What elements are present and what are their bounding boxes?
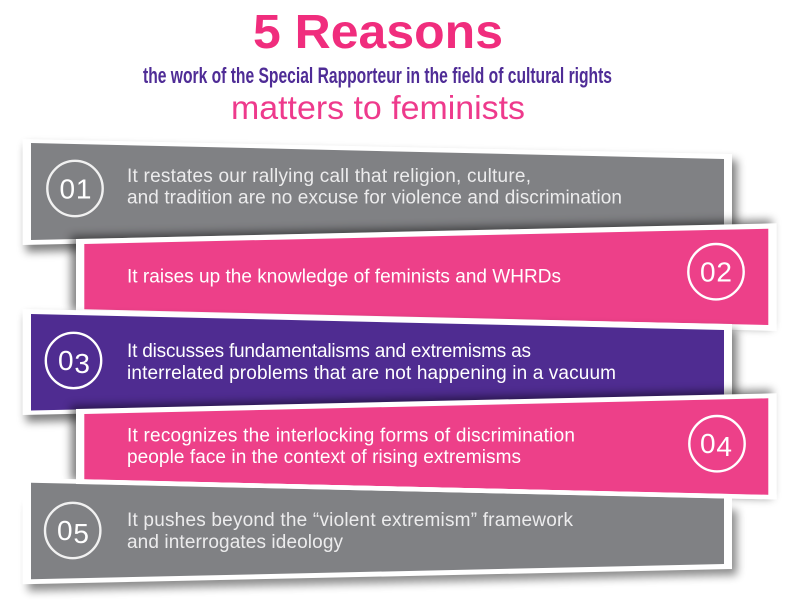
panel: reason 01 — [23, 139, 737, 252]
subheading: matters to feminists: matters to feminists — [231, 89, 525, 126]
text: reason 04 — [127, 426, 575, 468]
text: reason 05 — [127, 510, 574, 553]
subheading: special rapporteur: the work of the Special Rapporteur in the field of cultural rights — [143, 63, 612, 88]
text: reason 03: It discusses fundamentalisms and extremisms as — [127, 341, 531, 362]
icon: number 02: 02 — [700, 256, 733, 288]
icon: number 03 — [46, 333, 101, 388]
icon: number 03: 3 — [74, 348, 91, 379]
title — [143, 6, 612, 126]
text: reason 05: and interrogates ideology — [127, 532, 344, 553]
text: reason 01 — [127, 166, 622, 208]
icon: number 04 — [689, 416, 745, 471]
icon: number 05: 5 — [73, 518, 90, 549]
icon: number 05 — [45, 503, 100, 558]
text: reason 01: and tradition are no excuse for violence and discrimination — [127, 188, 622, 208]
icon: number 05: 0 — [57, 515, 73, 546]
text: reason 02: It raises up the knowledge of feminists and WHRDs — [127, 266, 561, 288]
text: reason 04: It recognizes the interlocking forms of discrimination — [127, 426, 575, 446]
icon: number 03: 0 — [58, 345, 74, 376]
panel: reason 04 — [71, 390, 777, 500]
panel: reason 05 — [23, 478, 777, 591]
panel: reason 02 — [71, 220, 777, 331]
icon: number 01: 01 — [60, 174, 92, 204]
text: reason 05: It pushes beyond the “violent extremism” framework — [127, 510, 574, 531]
icon: number 04: 0 — [700, 428, 716, 459]
heading: 5 Reasons: 5 Reasons — [253, 6, 503, 59]
text: reason 03 — [127, 341, 616, 384]
icon: number 02 — [688, 244, 744, 299]
text: reason 03: interrelated problems that are not happening in a vacuum — [127, 363, 616, 384]
icon: number 04: 4 — [716, 431, 733, 462]
icon: number 01 — [47, 161, 103, 216]
text: reason 01: It restates our rallying call that religion, culture, — [127, 166, 531, 187]
text: reason 04: people face in the context of rising extremisms — [127, 447, 521, 468]
panel: reason 03 — [23, 309, 737, 422]
